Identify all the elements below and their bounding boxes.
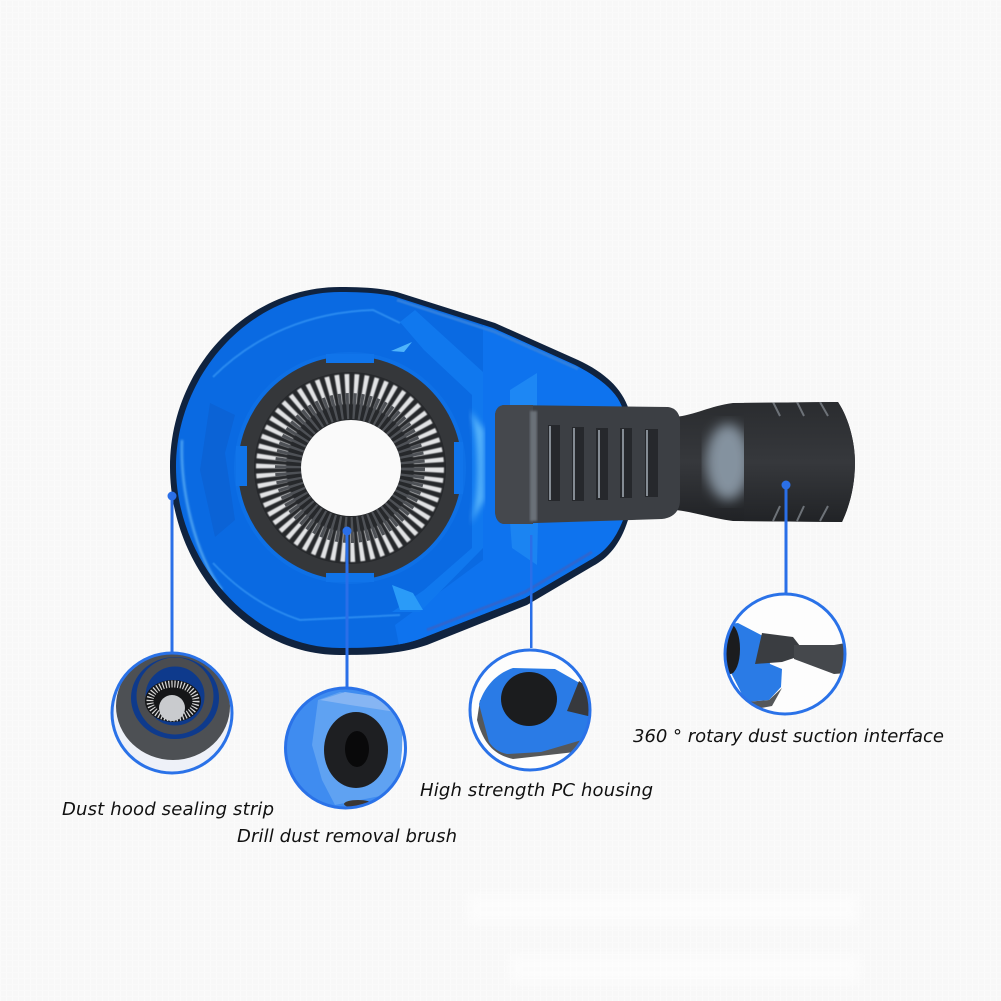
leader line xyxy=(782,480,790,595)
right raised area xyxy=(395,325,640,650)
faint watermark blocks xyxy=(468,895,860,983)
callout: brush xyxy=(284,526,408,810)
inset ring xyxy=(286,688,406,808)
label: brush: Drill dust removal brush xyxy=(237,826,457,847)
inset ring xyxy=(725,594,845,714)
bristle highlights xyxy=(271,389,429,547)
inset ring xyxy=(112,653,232,773)
callout: housing xyxy=(468,535,595,772)
center hole xyxy=(301,420,401,516)
lower panel line xyxy=(213,563,400,620)
leader line xyxy=(168,492,176,654)
inset photo xyxy=(726,623,844,708)
hood blue body xyxy=(176,292,623,648)
leader line xyxy=(530,535,532,648)
label: rotary interface: 360 ° rotary dust suction interface xyxy=(633,726,944,747)
leader line xyxy=(342,526,352,689)
collar notches xyxy=(236,354,463,582)
hood facets xyxy=(182,300,640,650)
brush xyxy=(234,352,466,584)
product: dust hood xyxy=(170,287,859,655)
top bright facet xyxy=(391,342,412,352)
bristle shadows xyxy=(288,406,412,530)
left edge glare xyxy=(182,440,222,590)
handle xyxy=(495,405,680,524)
callout: sealing strip xyxy=(110,492,236,776)
callout: rotary interface xyxy=(720,480,848,717)
glare near brush xyxy=(470,410,484,525)
inset photo xyxy=(287,690,402,806)
brush blue seat xyxy=(234,352,466,584)
brush collar xyxy=(238,356,462,580)
label: sealing strip: Dust hood sealing strip xyxy=(62,799,274,820)
inset photo xyxy=(477,668,588,759)
suction nozzle xyxy=(675,400,859,525)
inset ring xyxy=(470,650,590,770)
bristle base xyxy=(254,372,446,564)
bottom bright facet xyxy=(392,585,423,610)
inset photo xyxy=(114,654,230,772)
left panel xyxy=(200,403,235,537)
label: housing: High strength PC housing xyxy=(420,780,653,801)
right column facets xyxy=(510,373,537,406)
upper panel line xyxy=(213,310,400,377)
hood dark sealing rim xyxy=(170,287,629,655)
